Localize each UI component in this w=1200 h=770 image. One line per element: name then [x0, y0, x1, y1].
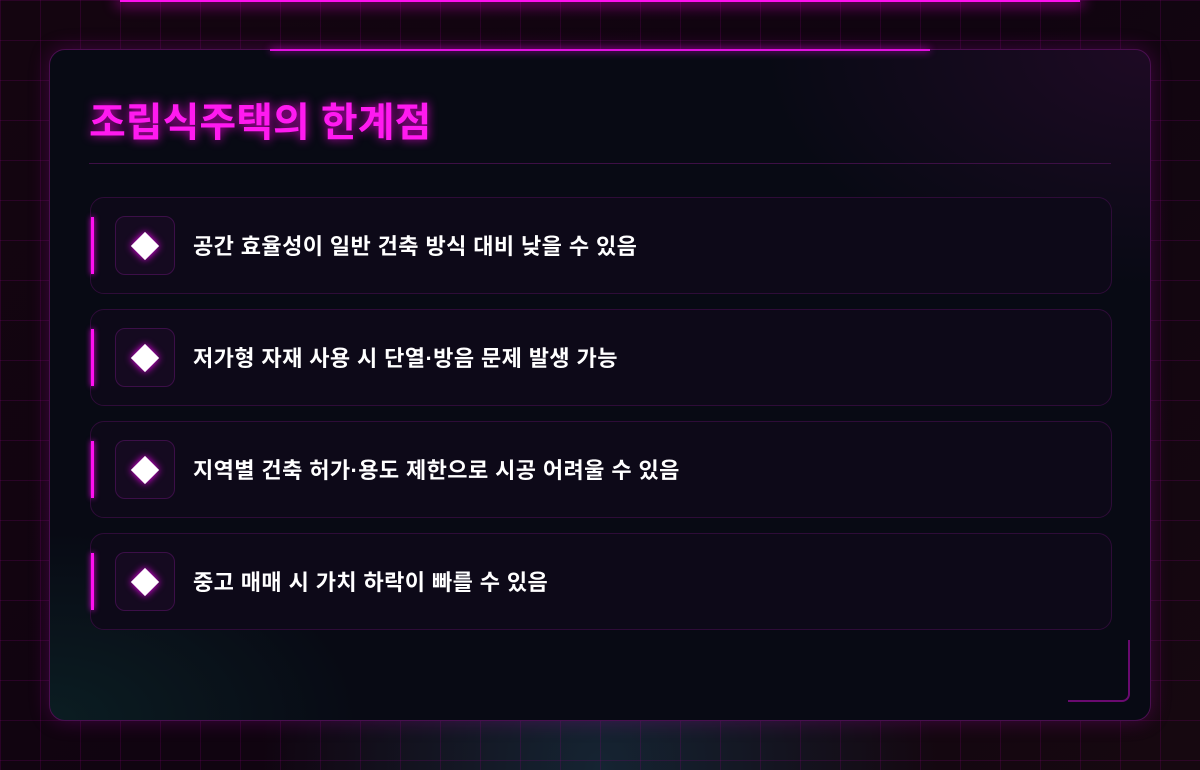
icon: diamond: [115, 552, 175, 611]
icon: diamond: [115, 440, 175, 499]
title: 조립식주택의 한계점: [89, 101, 431, 145]
text: 공간 효율성이 일반 건축 방식 대비 낮을 수 있음: [193, 234, 637, 259]
item 1: [90, 197, 1112, 294]
icon: diamond: [115, 328, 175, 387]
item 2: [90, 309, 1112, 406]
corner bracket: [1068, 640, 1130, 702]
text: 중고 매매 시 가치 하락이 빠를 수 있음: [193, 570, 548, 595]
item 4: [90, 533, 1112, 630]
item 3: [90, 421, 1112, 518]
text: 저가형 자재 사용 시 단열·방음 문제 발생 가능: [193, 346, 618, 371]
icon: diamond: [115, 216, 175, 275]
text: 지역별 건축 허가·용도 제한으로 시공 어려울 수 있음: [193, 458, 680, 483]
